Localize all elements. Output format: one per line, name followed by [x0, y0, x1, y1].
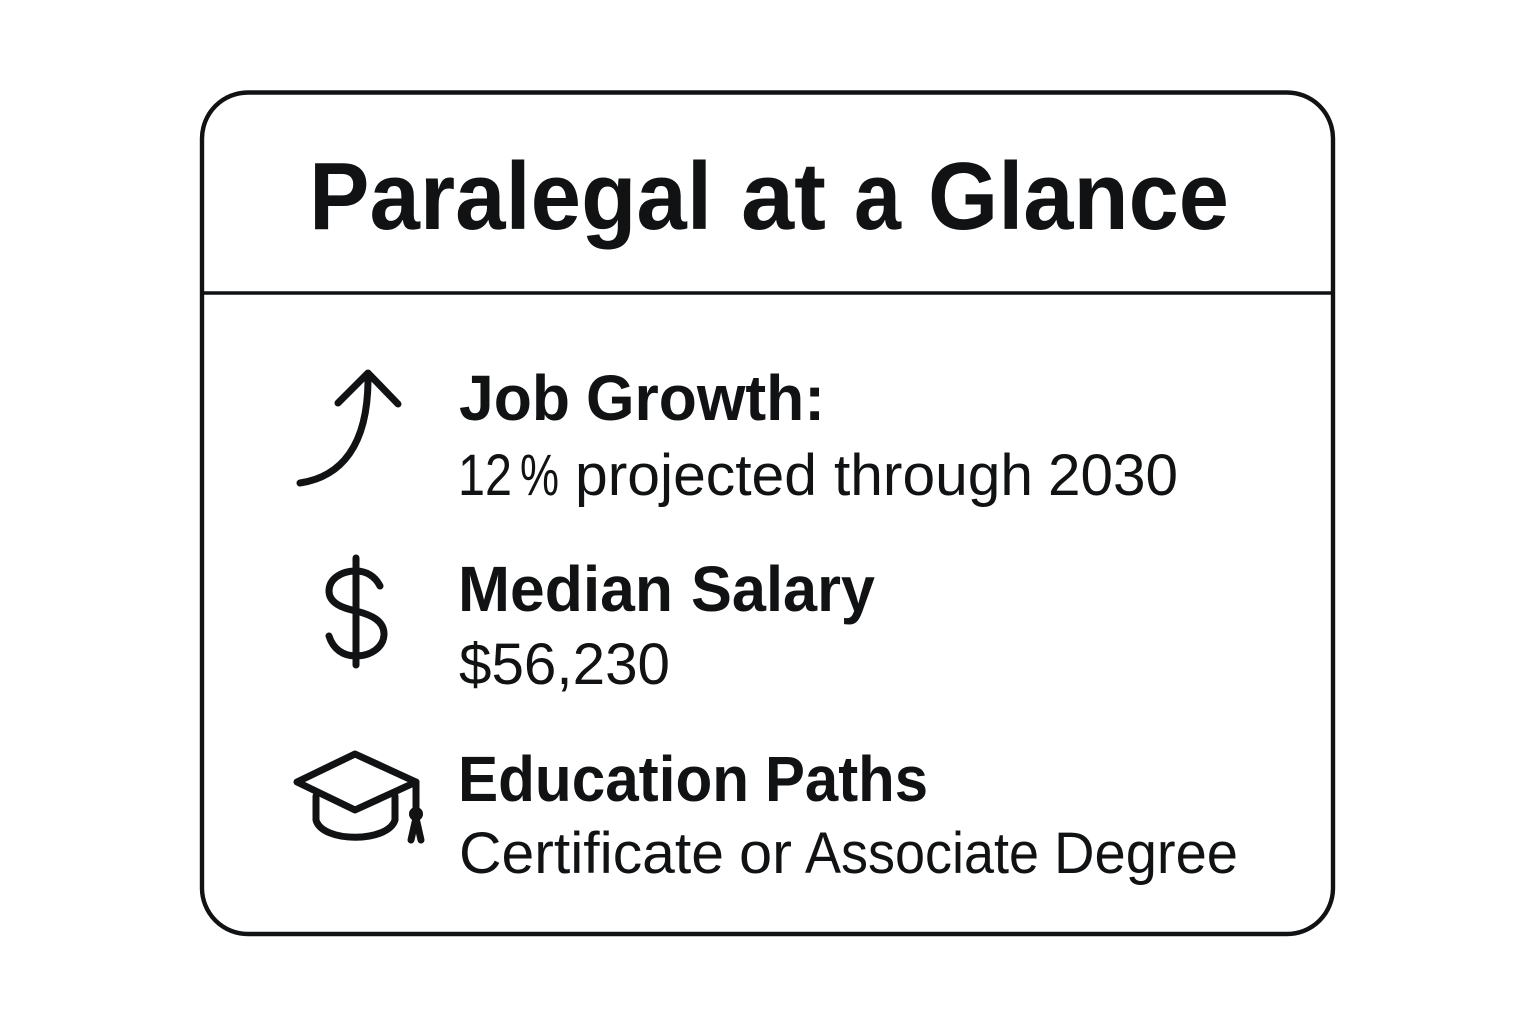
education paths heading [458, 743, 928, 815]
job growth value: 12 [458, 443, 512, 508]
education paths value: Degree [1054, 821, 1238, 886]
icon: growth arrow [300, 373, 398, 483]
education paths value [459, 821, 1238, 886]
title [309, 143, 1229, 250]
job growth heading: Job [459, 362, 570, 434]
median salary heading [458, 553, 875, 625]
median salary heading: Median [458, 553, 673, 625]
title: a [854, 143, 902, 250]
icon: graduation cap [297, 754, 421, 840]
panel: paralegal card [202, 92, 1333, 934]
job growth value: 2030 [1048, 443, 1178, 508]
icon: dollar sign [329, 558, 384, 665]
education paths heading: Education [458, 743, 749, 815]
title: at [741, 143, 826, 250]
job growth heading [459, 362, 825, 434]
education paths value: Certificate [459, 821, 724, 886]
median salary heading: Salary [691, 553, 875, 625]
job growth value [458, 443, 1178, 508]
education paths value: or [739, 821, 792, 886]
education paths heading: Paths [765, 743, 928, 815]
job growth heading: Growth: [586, 362, 825, 434]
job growth value: % [520, 443, 559, 508]
job growth value: projected [575, 443, 817, 508]
median salary value: $56,230 [459, 632, 670, 697]
education paths value: Associate [805, 821, 1039, 886]
job growth value: through [834, 443, 1033, 508]
title: Paralegal [309, 143, 712, 250]
title: Glance [928, 143, 1229, 250]
